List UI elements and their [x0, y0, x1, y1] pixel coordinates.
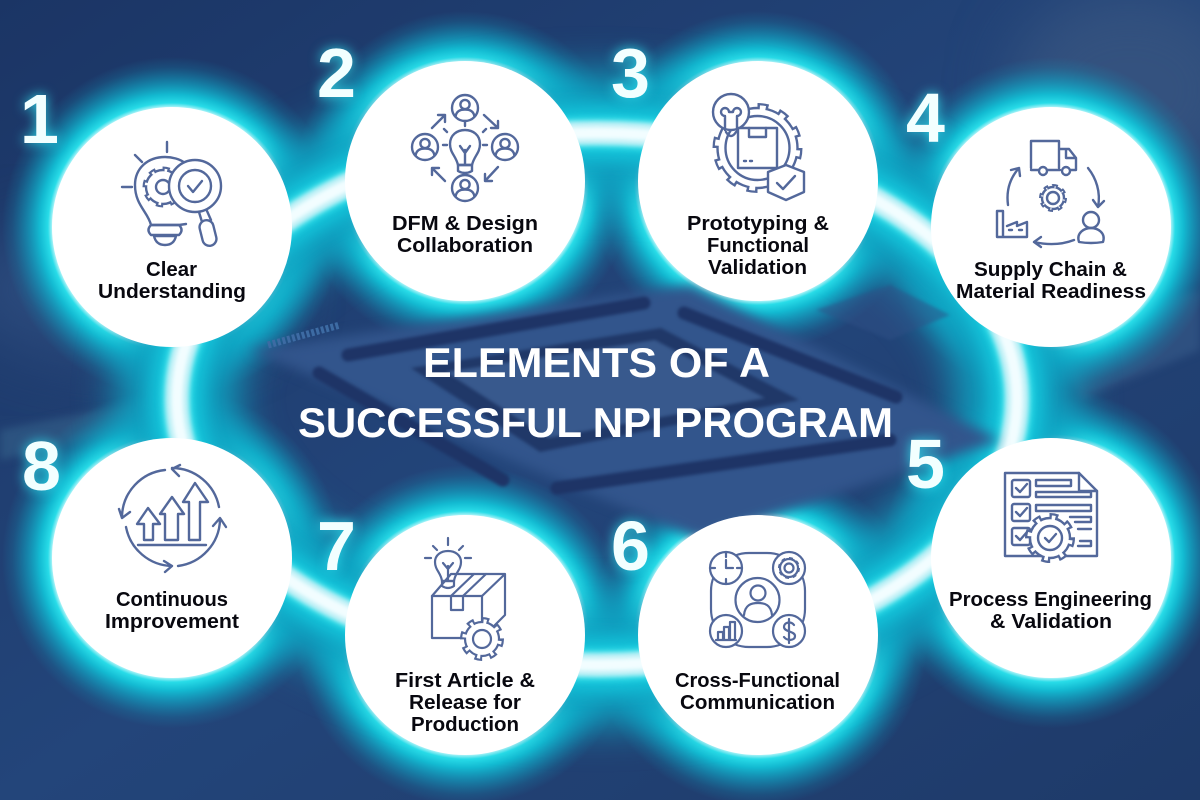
icon: people around a bulb: [412, 95, 518, 201]
number 3: 3: [611, 34, 650, 112]
number 8: 8: [22, 427, 61, 505]
label: [395, 670, 535, 736]
label: [105, 589, 239, 633]
panel: 7 First Article & Release for Production: [345, 515, 585, 755]
label: Continuous: [116, 589, 228, 611]
panel: 8 Continuous Improvement: [52, 438, 292, 678]
panel: 1 Clear Understanding: [52, 107, 292, 347]
label: First Article &: [395, 670, 535, 692]
label: Collaboration: [397, 235, 533, 257]
label: Prototyping &: [687, 213, 829, 235]
panel: 2 DFM & Design Collaboration: [345, 61, 585, 301]
icon: bulb, gear and magnifier: [122, 142, 221, 247]
number 6: 6: [611, 507, 650, 585]
number 2: 2: [317, 34, 356, 112]
number 5: 5: [906, 425, 945, 503]
label: Cross-Functional: [675, 670, 840, 692]
label: Understanding: [98, 281, 246, 303]
icon: checklist document with gear: [1005, 473, 1097, 558]
number 7: 7: [317, 507, 356, 585]
label: Functional: [707, 235, 809, 257]
glowing elliptical ring: [177, 133, 1017, 665]
label: Supply Chain &: [974, 259, 1127, 281]
label: [675, 670, 840, 714]
label: Communication: [680, 692, 835, 714]
icon: bulb, box and gear: [425, 538, 505, 656]
icon: person with clock, gear, chart and dollar: [710, 552, 805, 647]
panel: 3 Prototyping & Functional Validation: [638, 61, 878, 301]
panel: 6 Cross-Functional Communication: [638, 515, 878, 755]
label: DFM & Design: [392, 213, 538, 235]
panel: 5 Process Engineering & Validation: [931, 438, 1171, 678]
label: & Validation: [990, 611, 1112, 633]
label: Validation: [708, 257, 807, 279]
number 4: 4: [906, 79, 945, 157]
label: Production: [411, 714, 519, 736]
title: [298, 339, 893, 446]
icon: gear, box, bulb and shield: [713, 94, 804, 200]
label: Clear: [146, 259, 197, 281]
label: Release for: [409, 692, 521, 714]
label: [956, 259, 1146, 303]
label: [392, 213, 538, 257]
icon: rising arrows in a cycle: [119, 465, 226, 572]
panel: 4 Supply Chain & Material Readiness: [931, 107, 1171, 347]
label: [98, 259, 246, 303]
number 1: 1: [20, 80, 59, 158]
label: Improvement: [105, 611, 239, 633]
title: ELEMENTS OF A: [423, 339, 770, 386]
label: [949, 589, 1152, 633]
icon: supply chain cycle: [997, 141, 1104, 247]
label: Process Engineering: [949, 589, 1152, 611]
title: SUCCESSFUL NPI PROGRAM: [298, 399, 893, 446]
label: [687, 213, 829, 279]
label: Material Readiness: [956, 281, 1146, 303]
central processor chip: [250, 285, 1000, 540]
